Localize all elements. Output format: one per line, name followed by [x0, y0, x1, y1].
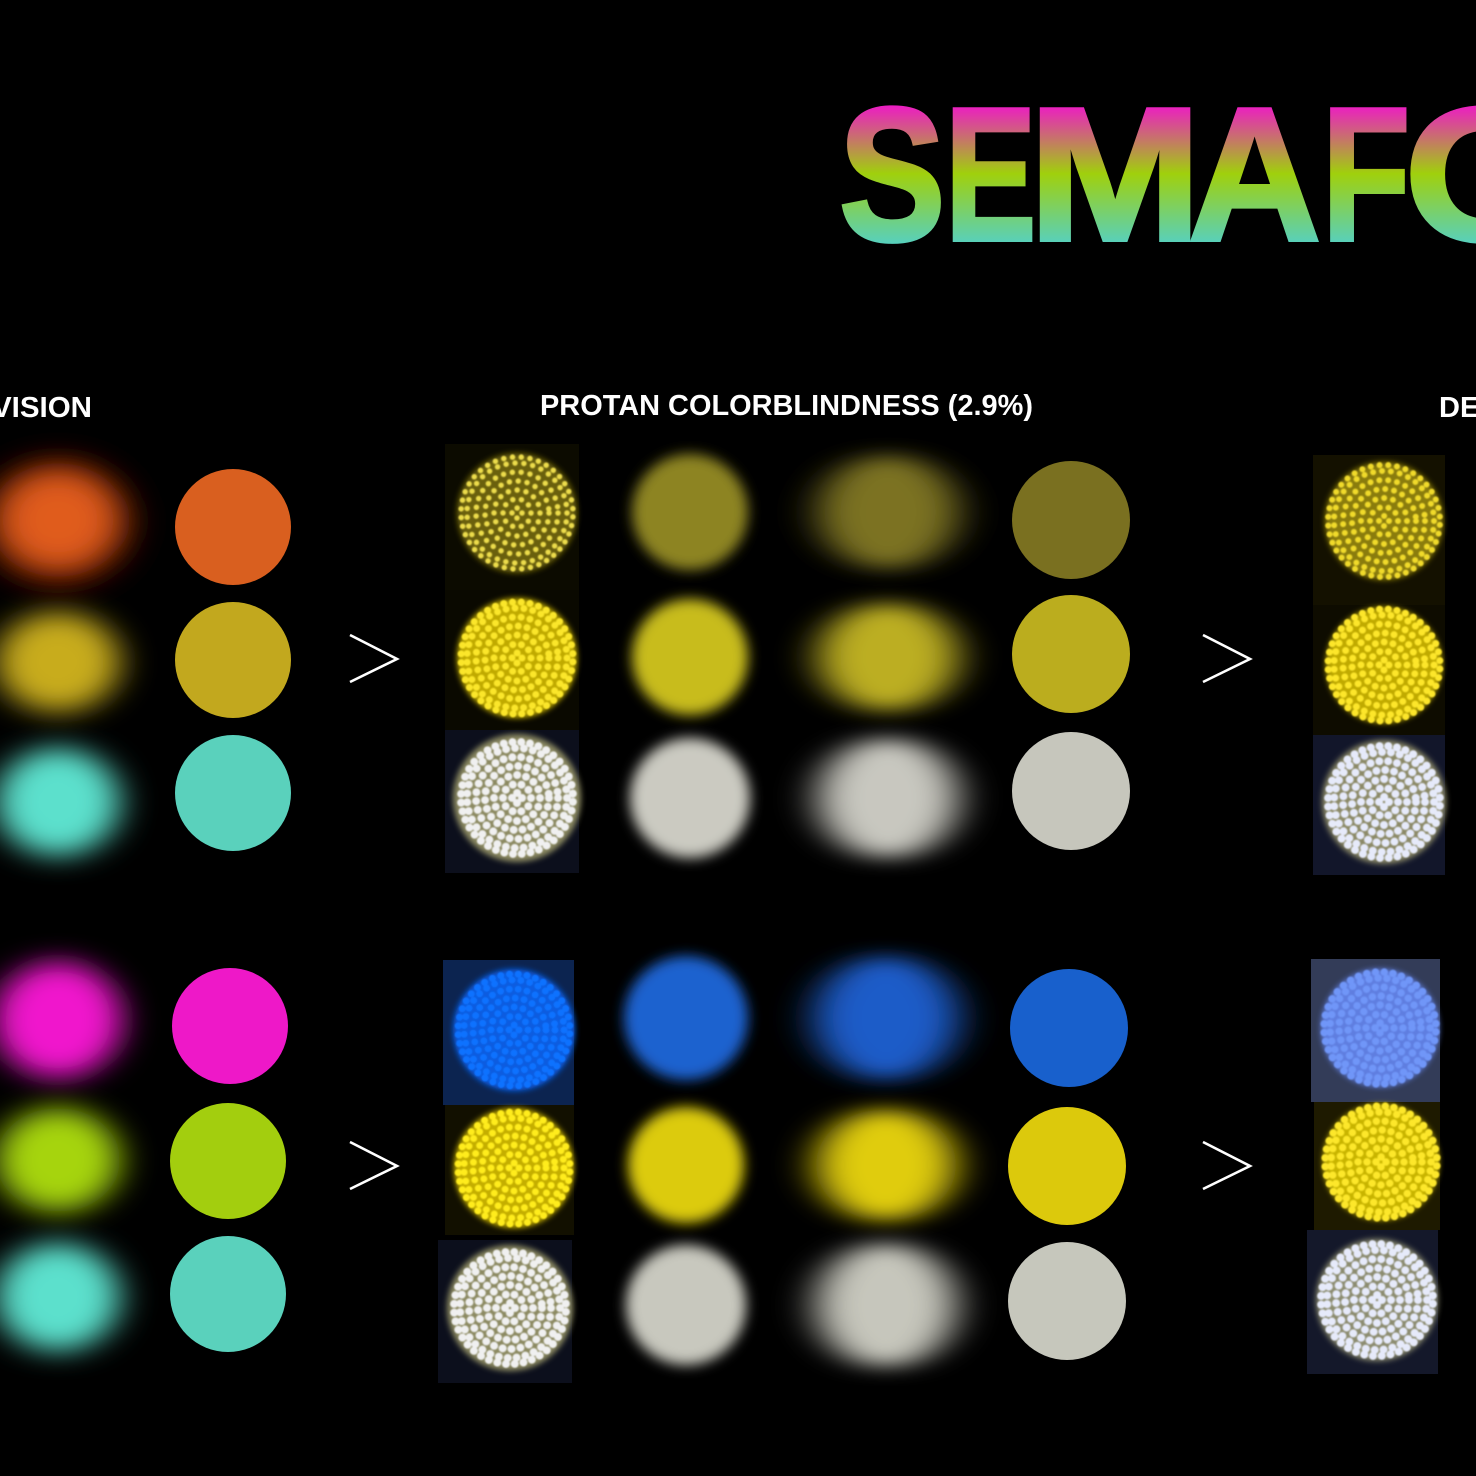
blurred dim yellow — [632, 454, 748, 570]
led photo: yellow — [1314, 1102, 1441, 1230]
blurred teal light — [0, 748, 120, 856]
blurred orange light — [0, 456, 134, 588]
very blurred blue — [814, 956, 958, 1080]
title — [839, 68, 1476, 281]
flat grey circle — [1008, 1242, 1126, 1360]
panel: protan top — [445, 444, 1130, 873]
panel: normal vision top — [0, 456, 291, 856]
flat dim yellow circle — [1012, 461, 1130, 579]
arrow — [350, 1142, 397, 1189]
arrow — [350, 635, 397, 682]
led photo: white — [438, 1240, 573, 1383]
led photo: blue — [443, 960, 575, 1105]
flat yellow circle — [1008, 1107, 1126, 1225]
led photo: periwinkle — [1311, 959, 1440, 1102]
flat yellow circle — [1012, 595, 1130, 713]
very blurred yellow — [816, 1109, 956, 1221]
very blurred dim yellow — [818, 455, 958, 569]
panel: deutan top — [1313, 455, 1446, 875]
title: E — [945, 69, 1036, 281]
led photo: bright yellow — [1313, 605, 1445, 735]
blurred blue — [624, 956, 748, 1080]
led photo: white — [1307, 1230, 1438, 1374]
blurred amber light — [0, 612, 120, 712]
arrow — [1203, 1142, 1250, 1189]
title: F — [1322, 68, 1410, 281]
blurred bright yellow — [632, 599, 748, 715]
title: A — [1188, 68, 1321, 281]
title: M — [1028, 69, 1202, 281]
flat teal circle — [170, 1236, 286, 1352]
title: S — [839, 69, 945, 281]
led photo: white — [1313, 735, 1446, 875]
blurred magenta light — [0, 962, 122, 1078]
flat magenta circle — [172, 968, 288, 1084]
flat orange circle — [175, 469, 291, 585]
blurred white — [630, 738, 750, 858]
arrow — [1203, 635, 1250, 682]
blurred lime light — [0, 1108, 120, 1212]
panel: deutan bottom — [1307, 959, 1441, 1374]
very blurred white — [818, 738, 958, 858]
led photo: dim yellow — [1313, 455, 1445, 605]
flat blue circle — [1010, 969, 1128, 1087]
panel: protan bottom — [438, 956, 1128, 1383]
flat grey circle — [1012, 732, 1130, 850]
flat teal circle — [175, 735, 291, 851]
heading: protan colorblindness: PROTAN COLORBLINDNESS (2.9%) — [540, 390, 1033, 422]
blurred white — [626, 1245, 746, 1365]
blurred teal light — [0, 1243, 120, 1351]
flat lime circle — [170, 1103, 286, 1219]
led photo: white — [445, 730, 581, 873]
very blurred white — [816, 1243, 956, 1367]
led photo: yellow — [445, 1105, 574, 1235]
led photo: bright yellow — [445, 590, 579, 730]
led photo: dim yellow — [445, 444, 579, 590]
very blurred bright yellow — [818, 603, 958, 711]
panel: normal vision bottom — [0, 962, 288, 1352]
blurred yellow — [628, 1107, 744, 1223]
flat amber circle — [175, 602, 291, 718]
